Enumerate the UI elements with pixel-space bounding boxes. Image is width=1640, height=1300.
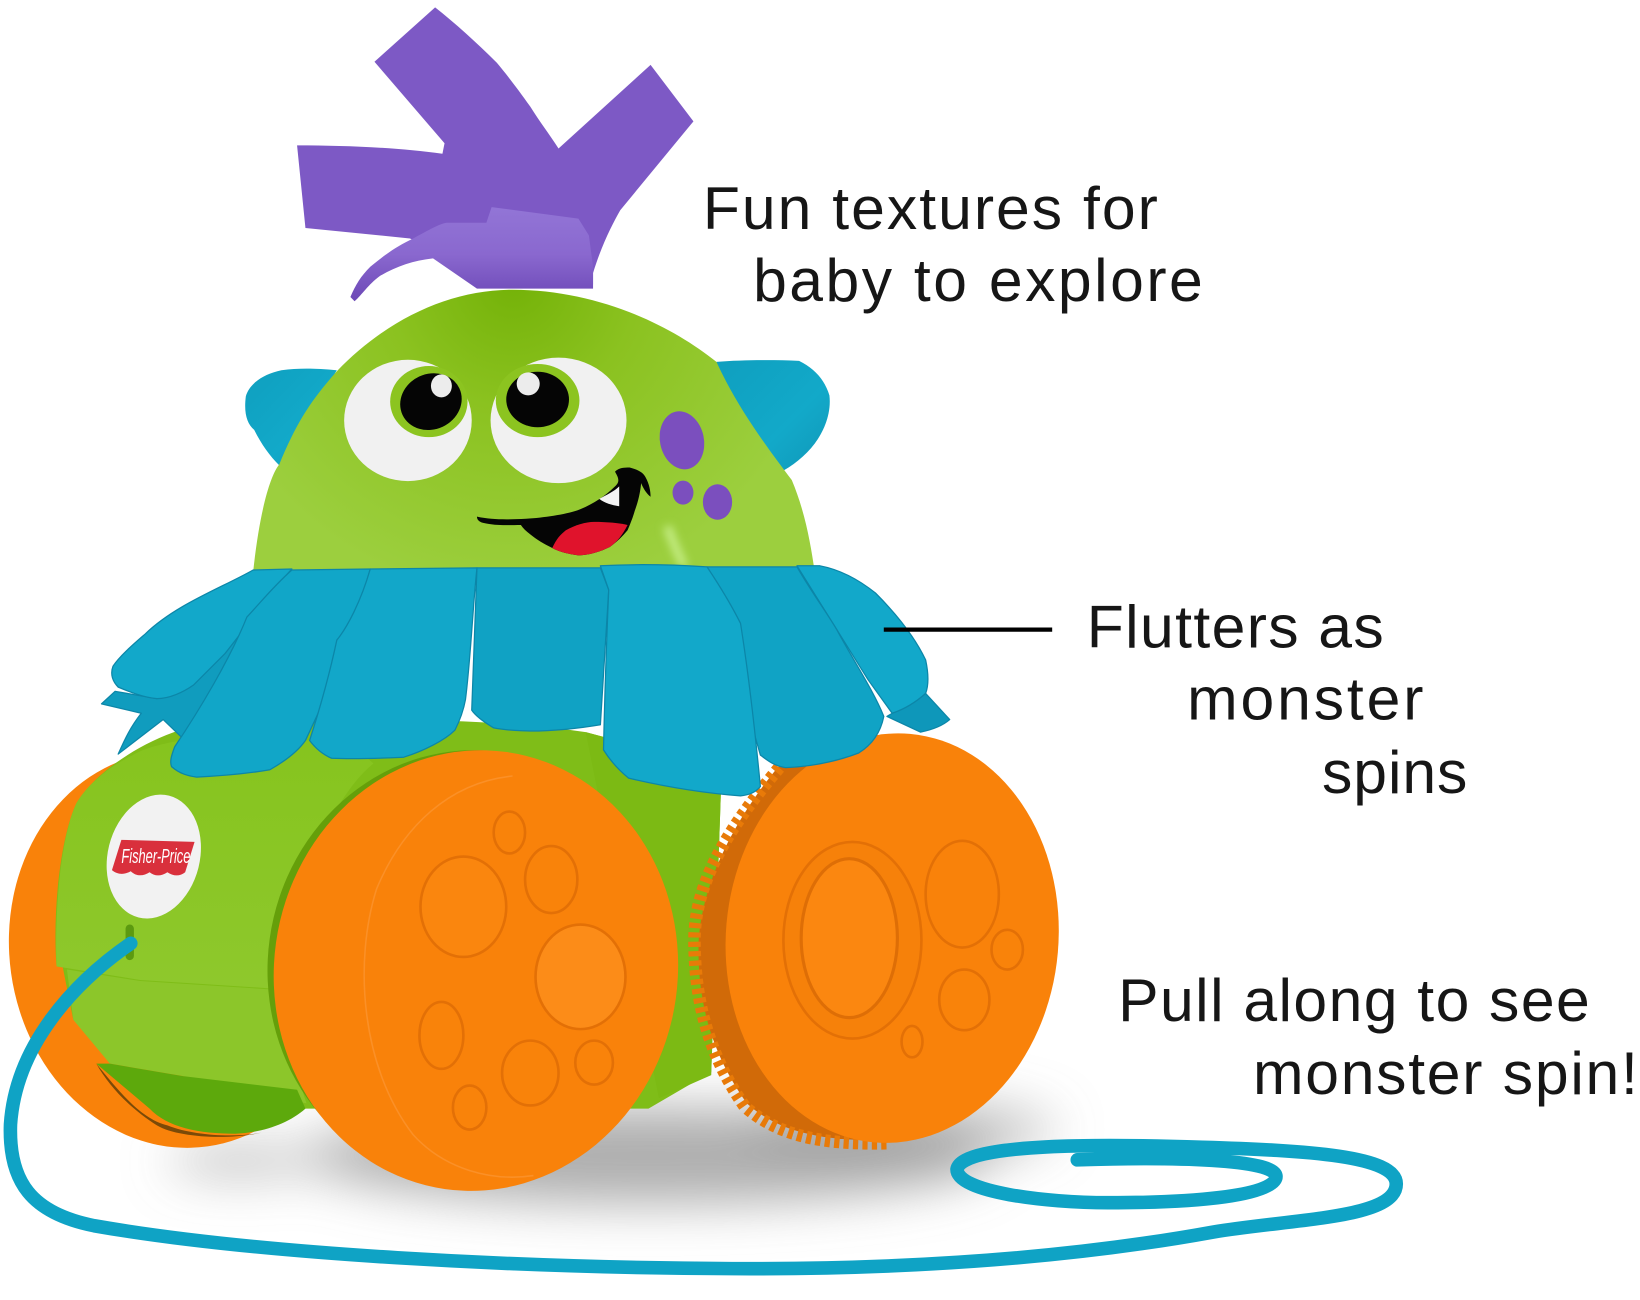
label: flutters: Flutters as [1087, 592, 1384, 660]
right eye [491, 358, 627, 483]
back felt flaps [101, 617, 256, 754]
blue felt skirt [101, 565, 950, 796]
label: pull along [1118, 966, 1638, 1107]
label: fun textures: baby to explore [753, 246, 1203, 314]
label: flutters: spins [1322, 738, 1467, 806]
petal far left [112, 569, 292, 699]
label: fun textures [703, 174, 1203, 314]
front wheel paw pattern [419, 812, 625, 1130]
Fisher-Price logo: Fisher-Price [121, 846, 190, 868]
petal centre-right [600, 565, 760, 796]
right wheel gear teeth [694, 763, 920, 1143]
front wheel rim [364, 776, 533, 1177]
petal centre [472, 568, 609, 731]
mouth [477, 467, 651, 555]
Fisher-Price logo [94, 785, 214, 929]
petal right [707, 567, 884, 768]
ears [245, 369, 337, 465]
right wheel paw pattern [783, 841, 1023, 1057]
leader line [884, 628, 1052, 632]
back orange wheel [0, 729, 376, 1170]
string hole [126, 925, 134, 960]
left eye [344, 360, 472, 481]
green body back [55, 720, 722, 1109]
purple hair [297, 7, 693, 284]
label: fun textures: Fun textures for [703, 174, 1158, 242]
petal left [171, 569, 370, 777]
ground shadow [167, 1100, 1056, 1204]
body right side [586, 732, 722, 1098]
green head [253, 290, 815, 572]
head highlight [663, 525, 688, 567]
underside ribs [96, 1064, 305, 1134]
green body upper panel [56, 736, 373, 988]
label: flutters [1087, 592, 1467, 806]
green body lower panel [67, 970, 306, 1103]
spots [654, 407, 732, 520]
front orange wheel [245, 724, 707, 1217]
petal far right [797, 566, 928, 713]
front wheel shadow edge [240, 724, 700, 1209]
petal centre-left [310, 568, 477, 759]
label: flutters: monster [1187, 665, 1423, 733]
label: pull along: Pull along to see [1118, 966, 1590, 1034]
pull string [10, 943, 1396, 1269]
label: pull along: monster spin! [1253, 1039, 1638, 1107]
right orange wheel [709, 719, 1076, 1157]
hair front loop [350, 207, 593, 301]
